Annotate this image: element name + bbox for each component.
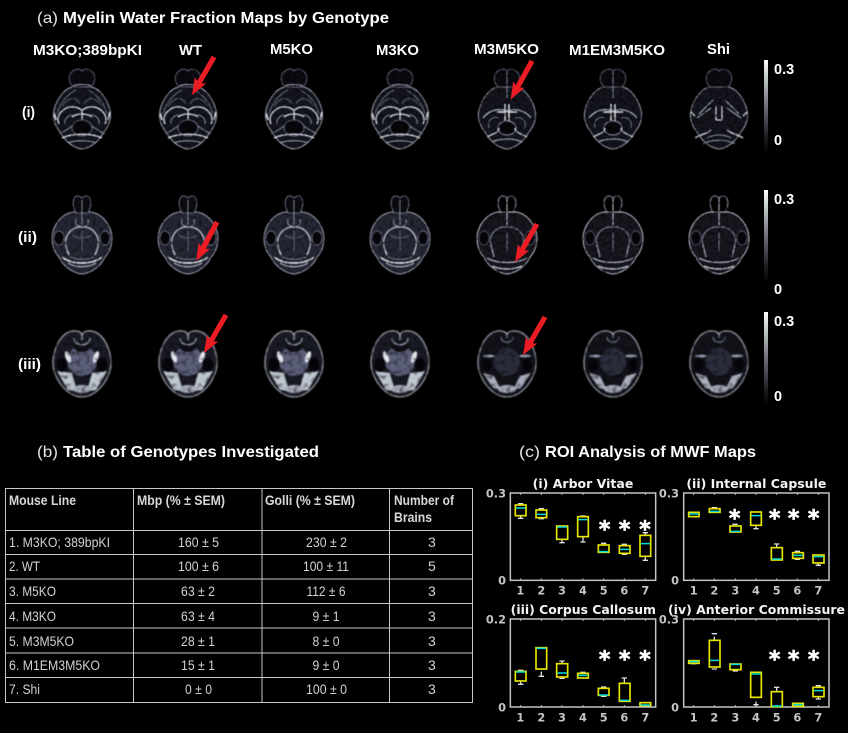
table header: Number of [394, 492, 454, 508]
genotype column labels: Shi [707, 42, 730, 58]
medians [689, 511, 823, 559]
axis labels: 4 [579, 711, 587, 725]
boxes [689, 509, 824, 563]
row 2: 100 ± 6 [178, 558, 219, 574]
axis labels: 7 [814, 584, 822, 598]
row 5: 28 ± 1 [181, 633, 215, 649]
axis labels: 0 [671, 574, 679, 588]
genotype column labels [33, 42, 730, 59]
boxes [515, 505, 651, 556]
axis labels: 3 [731, 711, 739, 725]
row 6: 9 ± 0 [312, 657, 340, 673]
row 1: 160 ± 5 [178, 534, 219, 550]
axis labels: 7 [641, 711, 649, 725]
row 7: 0 ± 0 [185, 681, 212, 697]
axis labels: 5 [600, 584, 608, 598]
axis labels: 6 [793, 584, 801, 598]
row 1: 230 ± 2 [306, 534, 347, 550]
significance stars: * [599, 518, 611, 543]
table header: Golli (% ± SEM) [265, 492, 355, 508]
arrow: WT row ii [191, 219, 223, 264]
axis labels: 2 [537, 711, 545, 725]
axis labels: 0.3 [486, 486, 506, 500]
row 3 [9, 583, 436, 599]
whiskers [518, 503, 648, 560]
plot title: (ii) Internal Capsule [686, 477, 826, 491]
axis frame [510, 493, 656, 580]
axis labels: 2 [537, 584, 545, 598]
brain: M3M5KO row ii [477, 196, 537, 274]
colour bar row i: 0.3 [774, 62, 794, 78]
significance stars: * [788, 507, 800, 532]
significance stars: * [788, 648, 800, 673]
row 2 [9, 558, 436, 574]
plot title: (iv) Anterior Commissure [668, 603, 845, 617]
boxes [689, 640, 824, 707]
axis labels: 3 [731, 584, 739, 598]
box plot: Corpus Callosum [486, 603, 656, 725]
axis labels: 5 [773, 584, 781, 598]
title: panel b: (b) [37, 444, 58, 461]
brain: M3KO row iii [371, 331, 429, 397]
significance stars: * [599, 648, 611, 673]
axis labels: 1 [690, 584, 698, 598]
axis labels: 0.3 [659, 612, 679, 626]
arrow: M3M5KO row ii [509, 221, 543, 265]
significance stars: * [729, 507, 741, 532]
row labels [18, 105, 41, 373]
row 1: 1. M3KO; 389bpKI [9, 534, 110, 550]
row 3: 3 [428, 583, 436, 599]
arrow: WT row iii [198, 312, 232, 356]
brain map row i [53, 69, 748, 149]
brain: M3KO;389bpKI row ii [52, 196, 112, 274]
medians [516, 648, 650, 705]
axis labels: 1 [516, 711, 524, 725]
row 4: 3 [428, 608, 436, 624]
brain: M3KO;389bpKI row i [53, 69, 111, 149]
row 7: 3 [428, 681, 436, 697]
arrow: WT row i [186, 54, 220, 98]
row 4: 63 ± 4 [181, 608, 215, 624]
axis labels: 5 [600, 711, 608, 725]
row 5: 3 [428, 633, 436, 649]
row 3: 63 ± 2 [181, 583, 215, 599]
significance stars: * [808, 507, 820, 532]
axis labels [659, 612, 822, 725]
table of genotypes [5, 488, 472, 702]
significance stars: * [808, 648, 820, 673]
row labels: (ii) [18, 230, 37, 246]
axis frame [510, 619, 656, 707]
boxes [515, 648, 651, 706]
whiskers [691, 634, 821, 706]
colour bar row ii: 0 [774, 282, 782, 298]
axis labels: 7 [814, 711, 822, 725]
row 6: 15 ± 1 [181, 657, 215, 673]
brain: Shi row iii [690, 331, 748, 397]
brain: M1EM3M5KO row ii [583, 196, 643, 274]
axis labels [486, 486, 649, 598]
row labels: (i) [22, 105, 35, 121]
brain: M1EM3M5KO row i [584, 69, 642, 149]
axis labels: 2 [710, 711, 718, 725]
box plot: Internal Capsule [659, 477, 829, 598]
title: panel b: Table of Genotypes Investigated [63, 444, 319, 461]
axis labels: 0 [498, 574, 506, 588]
axis labels: 3 [558, 584, 566, 598]
significance stars [769, 648, 820, 673]
medians [516, 508, 650, 552]
axis labels [659, 486, 822, 598]
axis labels: 4 [752, 584, 760, 598]
row 6: 6. M1EM3M5KO [9, 657, 100, 673]
significance stars [729, 507, 820, 532]
brain: M3KO row i [371, 69, 429, 149]
colour bar row ii [764, 190, 794, 298]
brain: M5KO row ii [264, 196, 324, 274]
title: panel c: ROI Analysis of MWF Maps [545, 444, 756, 461]
axis labels: 5 [773, 711, 781, 725]
genotype column labels: M5KO [270, 42, 313, 58]
row 7 [9, 681, 436, 697]
row 7: 7. Shi [9, 681, 40, 697]
genotype column labels: M1EM3M5KO [569, 43, 665, 59]
axis labels: 0 [671, 700, 679, 714]
colour bar row ii: 0.3 [774, 192, 794, 208]
plot title: (iii) Corpus Callosum [511, 603, 656, 617]
brain: M5KO row i [265, 69, 323, 149]
table header: Mouse Line [9, 492, 76, 508]
axis labels [486, 612, 649, 725]
brain: M3M5KO row iii [478, 331, 536, 397]
axis labels: 7 [641, 584, 649, 598]
row 4: 4. M3KO [9, 608, 56, 624]
genotype column labels: M3M5KO [474, 42, 539, 58]
arrow: M3M5KO row iii [517, 314, 551, 358]
table header [9, 492, 454, 525]
axis labels: 6 [620, 711, 628, 725]
axis labels: 3 [558, 711, 566, 725]
row 5: 8 ± 0 [312, 633, 340, 649]
row 7: 100 ± 0 [306, 681, 347, 697]
row 2: 100 ± 11 [303, 558, 349, 574]
significance stars: * [619, 648, 631, 673]
table header: Brains [394, 509, 432, 525]
axis labels: 4 [579, 584, 587, 598]
significance stars: * [619, 518, 631, 543]
significance stars [599, 518, 651, 543]
significance stars [599, 648, 651, 673]
table header: Mbp (% ± SEM) [137, 492, 225, 508]
axis frame [684, 493, 829, 580]
row 6: 3 [428, 657, 436, 673]
row 2: 5 [428, 558, 436, 574]
axis labels: 0 [498, 700, 506, 714]
row 5 [9, 633, 436, 649]
axis labels: 1 [690, 711, 698, 725]
brain: Shi row ii [689, 196, 749, 274]
title: panel a: Myelin Water Fraction Maps by Genotype [63, 10, 389, 27]
row 5: 5. M3M5KO [9, 633, 74, 649]
colour bar row iii: 0.3 [774, 314, 794, 330]
row 3: 3. M5KO [9, 583, 56, 599]
brain: M3KO row ii [370, 196, 430, 274]
axis labels: 0.3 [659, 486, 679, 500]
whiskers [518, 661, 627, 696]
axis labels: 0.2 [486, 612, 506, 626]
row labels: (iii) [18, 357, 41, 373]
axis labels: 6 [793, 711, 801, 725]
brain map row iii [53, 331, 748, 397]
row 4 [9, 608, 436, 624]
brain: Shi row i [690, 69, 748, 149]
row 6 [9, 657, 436, 673]
row 3: 112 ± 6 [306, 583, 346, 599]
brain: WT row iii [159, 331, 217, 397]
axis frame [684, 619, 829, 707]
medians [689, 660, 823, 706]
row 4: 9 ± 1 [312, 608, 340, 624]
genotype column labels: M3KO;389bpKI [33, 43, 142, 59]
arrow: M3M5KO row i [505, 58, 538, 103]
axis labels: 1 [516, 584, 524, 598]
brain map row ii [52, 196, 749, 274]
significance stars: * [639, 648, 651, 673]
genotype column labels: WT [179, 43, 202, 59]
brain: WT row ii [158, 196, 218, 274]
row 2: 2. WT [9, 558, 40, 574]
colour bar row iii [764, 312, 794, 406]
row 1: 3 [428, 534, 436, 550]
significance stars: * [639, 518, 651, 543]
title: panel c: (c) [519, 444, 540, 461]
colour bar row i [764, 60, 794, 153]
whiskers [712, 508, 821, 565]
significance stars: * [769, 507, 781, 532]
axis labels: 2 [710, 584, 718, 598]
significance stars: * [769, 648, 781, 673]
colour bar row iii: 0 [774, 389, 782, 405]
title: panel a: (a) [37, 10, 58, 27]
box plot: Anterior Commissure [659, 603, 845, 725]
brain: M3M5KO row i [478, 69, 536, 149]
brain: M3KO;389bpKI row iii [53, 331, 111, 397]
brain: M1EM3M5KO row iii [584, 331, 642, 397]
row 1 [9, 534, 436, 550]
box plot: Arbor Vitae [486, 477, 656, 598]
plot title: (i) Arbor Vitae [533, 477, 633, 491]
brain: WT row i [159, 69, 217, 149]
genotype column labels: M3KO [376, 43, 419, 59]
axis labels: 6 [620, 584, 628, 598]
brain: M5KO row iii [265, 331, 323, 397]
colour bar row i: 0 [774, 133, 782, 149]
axis labels: 4 [752, 711, 760, 725]
